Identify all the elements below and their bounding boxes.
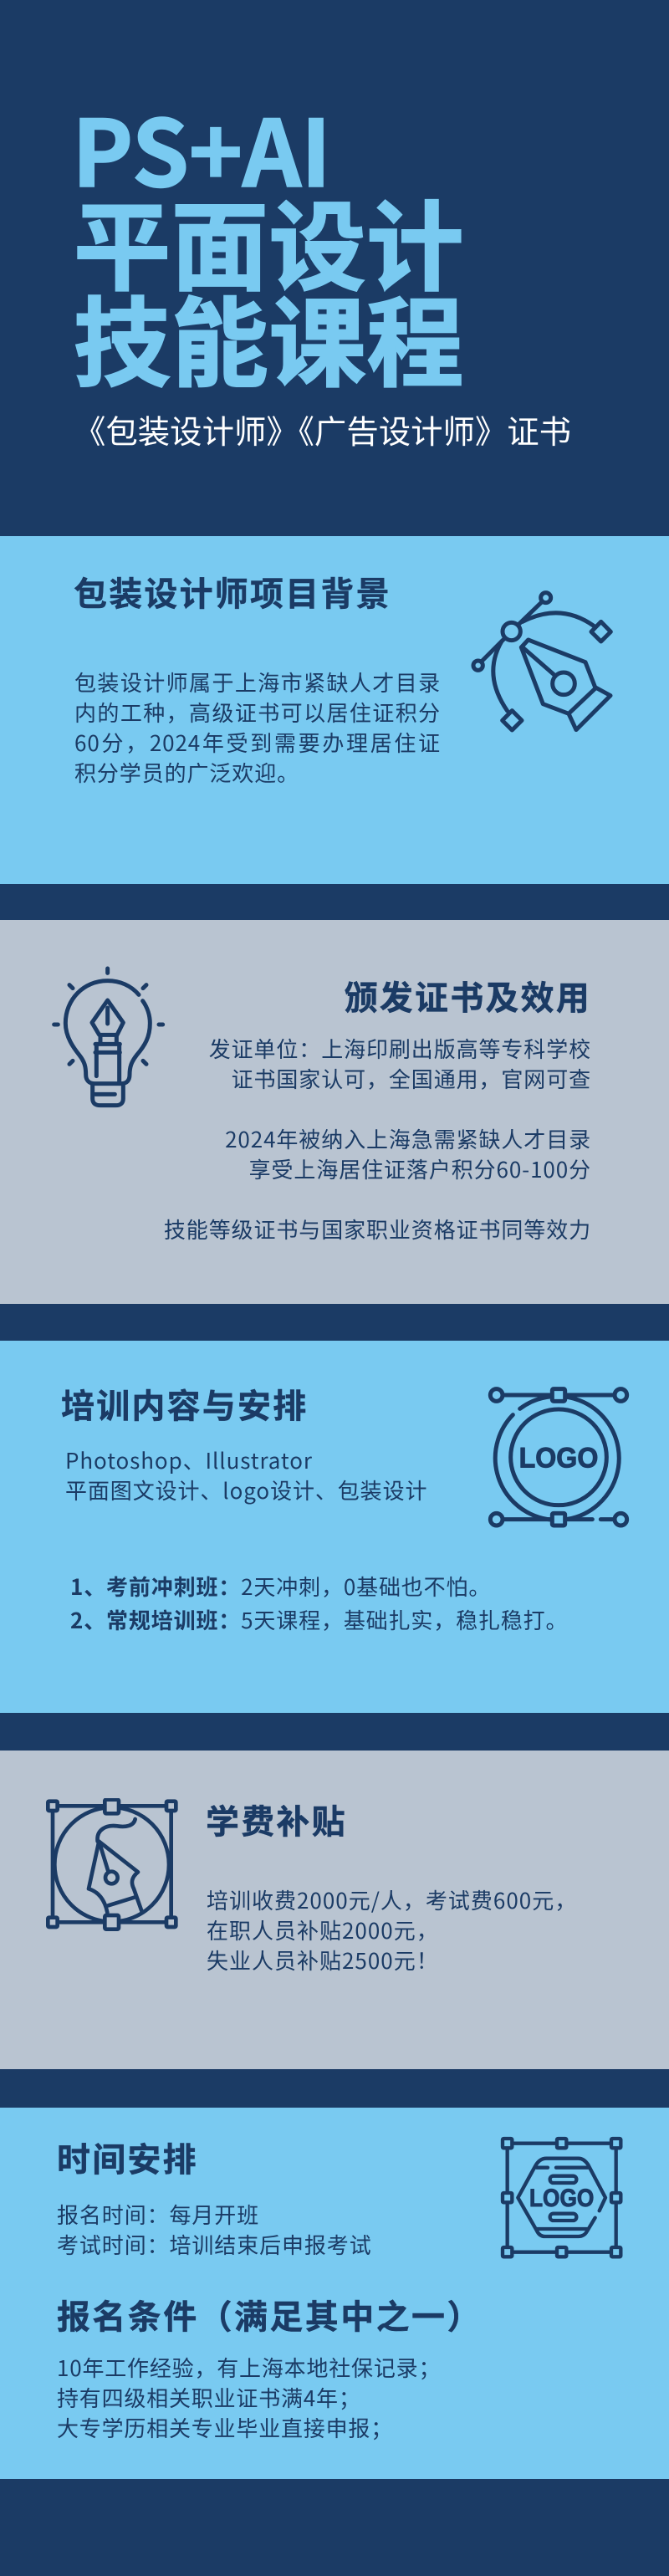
text: project background: 包装设计师属于上海市紧缺人才目录: [74, 667, 441, 698]
text: project background: 内的工种，高级证书可以居住证积分: [74, 697, 441, 728]
text: certificate: [164, 1033, 591, 1245]
panel: 学费补贴: [0, 1751, 669, 2069]
text: requirements: 10年工作经验，有上海本地社保记录；: [57, 2352, 441, 2383]
heading: requirements: 报名条件（满足其中之一）: [57, 2290, 483, 2338]
text: subsidy: 在职人员补贴2000元，: [207, 1914, 439, 1945]
icon: hexagon logo in frame: [500, 2136, 622, 2258]
heading: certificate: 颁发证书及效用: [345, 971, 591, 1020]
text: requirements: 持有四级相关职业证书满4年；: [57, 2382, 361, 2413]
icon: round logo with handles: [488, 1387, 629, 1527]
title line: PS+AI: PS+AI: [72, 79, 330, 213]
panel: 包装设计师项目背景: [0, 536, 669, 884]
text: class list: 1、考前冲刺班：2天冲刺，0基础也不怕。: [70, 1571, 491, 1602]
subtitle: 《包装设计师》《广告设计师》证书: [74, 406, 571, 453]
text: certificate: 2024年被纳入上海急需紧缺人才目录: [225, 1123, 591, 1154]
text: requirements: 大专学历相关专业毕业直接申报；: [57, 2412, 393, 2443]
text: schedule: [57, 2199, 372, 2260]
icon: pen in frame: [46, 1798, 178, 1931]
text: class list: [70, 1571, 568, 1635]
text: subsidy: 培训收费2000元/人，考试费600元，: [207, 1884, 577, 1915]
text: software and topics: [65, 1444, 427, 1505]
text: project background: 60分，2024年受到需要办理居住证: [74, 727, 441, 758]
title line: 技能课程: 技能课程: [74, 266, 464, 406]
text: certificate: 发证单位：上海印刷出版高等专科学校: [209, 1033, 591, 1064]
text: subsidy: 失业人员补贴2500元！: [207, 1945, 439, 1975]
text: certificate: 享受上海居住证落户积分60-100分: [249, 1153, 591, 1184]
icon: light bulb with pen: [52, 967, 166, 1107]
icon: pen tool: [472, 590, 613, 733]
panel: 颁发证书及效用: [0, 920, 669, 1304]
icon: round logo with handles: LOGO: [519, 1443, 598, 1475]
heading: training content: 培训内容与安排: [61, 1379, 308, 1428]
panel: 培训内容与安排: [0, 1341, 669, 1713]
heading: project background: 包装设计师项目背景: [74, 567, 391, 616]
text: certificate: 技能等级证书与国家职业资格证书同等效力: [164, 1214, 591, 1245]
text: schedule: 报名时间：每月开班: [57, 2199, 259, 2230]
icon: hexagon logo in frame: LOGO: [529, 2185, 594, 2212]
heading: subsidy: 学费补贴: [206, 1795, 347, 1843]
panel: 时间安排与报名条件: [0, 2108, 669, 2479]
text: requirements: [57, 2352, 441, 2443]
title block: [72, 79, 464, 406]
text: schedule: 考试时间：培训结束后申报考试: [57, 2229, 372, 2260]
text: project background: 积分学员的广泛欢迎。: [74, 757, 299, 788]
text: project background: [74, 667, 441, 788]
text: software and topics: Photoshop、Illustrator: [65, 1444, 313, 1475]
text: subsidy: [207, 1884, 577, 1975]
text: certificate: 证书国家认可，全国通用，官网可查: [232, 1063, 591, 1094]
text: class list: 2、常规培训班：5天课程，基础扎实，稳扎稳打。: [70, 1604, 568, 1635]
title line: 平面设计: 平面设计: [74, 170, 464, 310]
text: software and topics: 平面图文设计、logo设计、包装设计: [65, 1475, 427, 1505]
heading: schedule: 时间安排: [57, 2133, 198, 2181]
